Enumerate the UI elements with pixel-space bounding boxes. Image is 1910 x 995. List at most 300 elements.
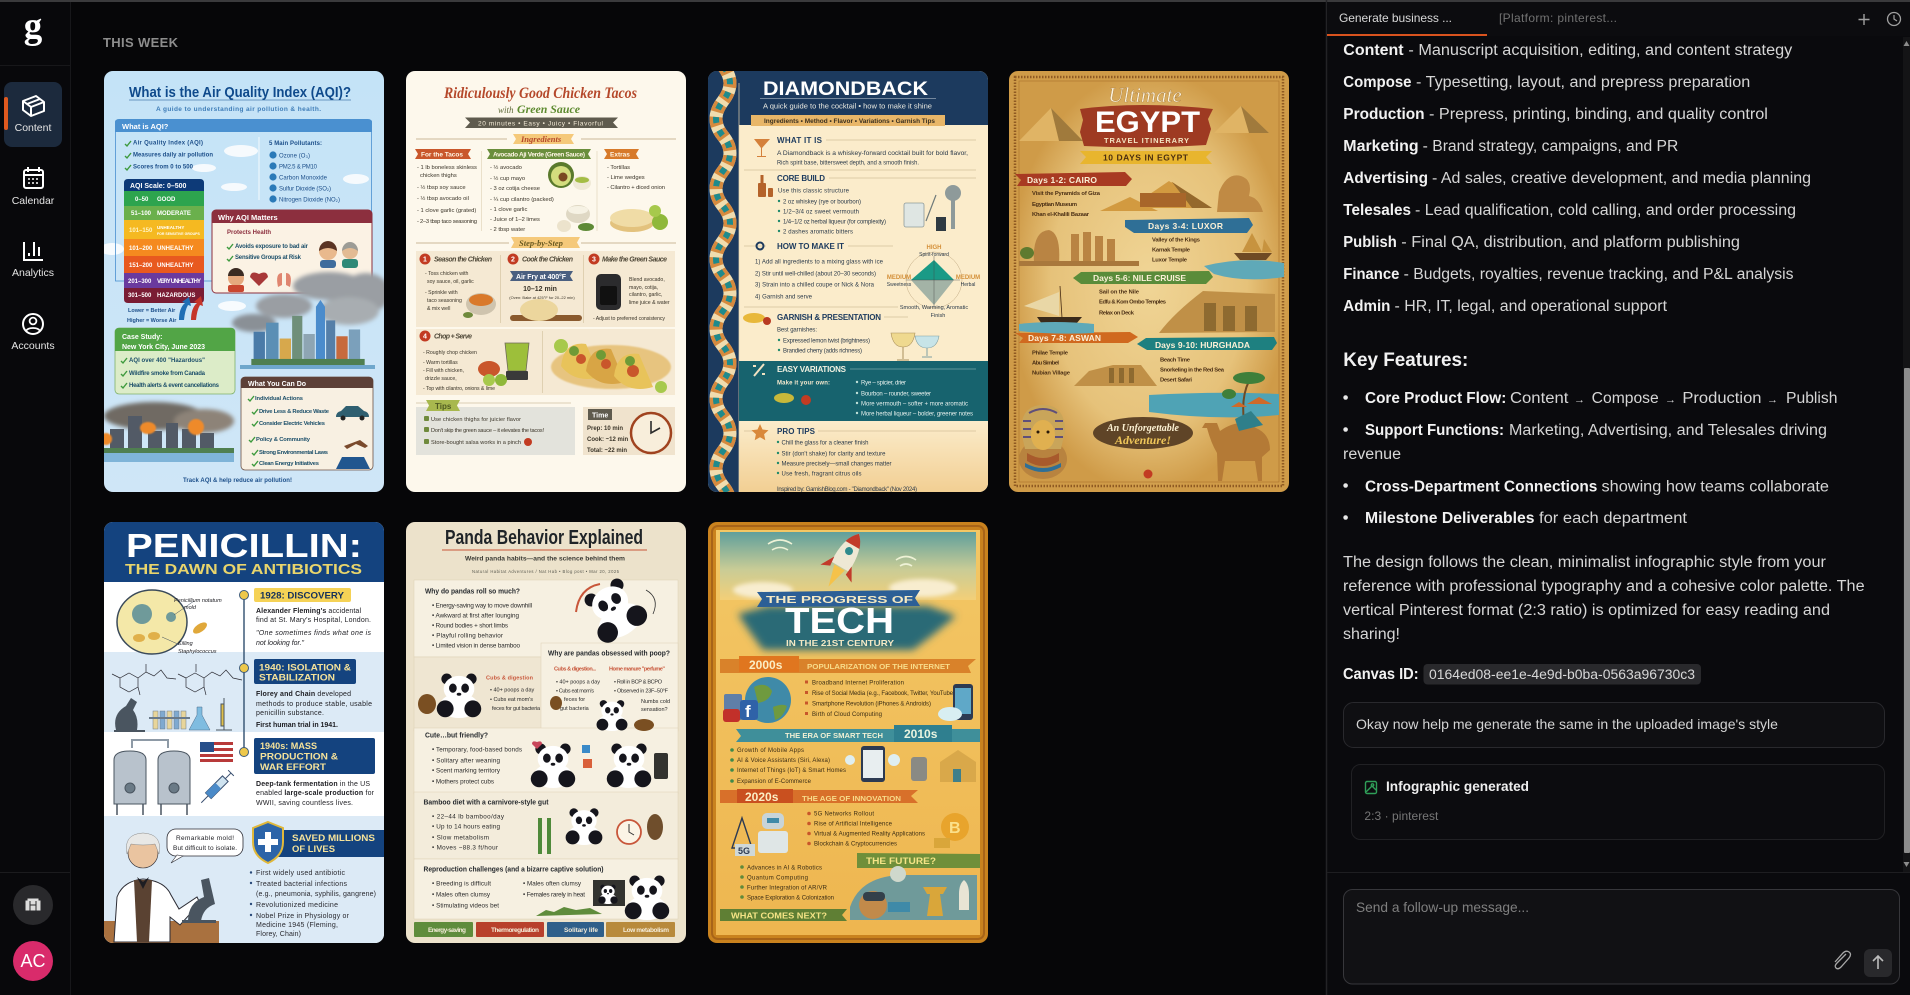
illustration: scientist with microscope	[104, 833, 219, 943]
poop facts: • 40+ poops a day	[556, 680, 600, 686]
illustration: lab equipment	[114, 698, 232, 732]
panel: easy variations: EASY VARIATIONS	[777, 365, 847, 374]
flavor radar chart: Sweetness	[887, 282, 912, 288]
steps panel: mayo, cotija,	[629, 285, 658, 291]
infographic card: egypt travel itinerary: Days 1-2: CAIRO	[1027, 175, 1097, 185]
band: 2010s	[736, 725, 980, 742]
user message bubble	[1344, 702, 1884, 748]
infographic card: chicken tacos: - ½ tbsp soy sauce	[417, 184, 466, 191]
time panel	[583, 407, 675, 455]
air fry banner: (Oven: Bake at 425°F for 20–22 min)	[509, 295, 575, 300]
infographic card: diamondback cocktail: Inspired by: GarnishBlog.com - "Diamondback" (Nov 2024)	[777, 487, 917, 493]
milestone 1940: methods to produce stable, usable	[256, 701, 372, 708]
banner: saved millions	[253, 822, 384, 863]
infographic card: progress of tech: Rise of Artificial Intelligence	[814, 822, 893, 828]
AQI scale table: UNHEALTHY	[157, 246, 194, 252]
band: what comes next: WHAT COMES NEXT?	[731, 910, 827, 920]
key features list: Cross-Department Connections	[1365, 478, 1597, 496]
title banner: THE PROGRESS OF	[766, 595, 913, 606]
milestone 1940: penicillin substance.	[256, 710, 324, 717]
key features list	[1343, 390, 1838, 527]
infographic card: diamondback cocktail: 2 dashes aromatic bitters	[783, 230, 853, 236]
poop facts: Cubs & digestion...	[554, 666, 596, 672]
title banner: TECH	[785, 600, 894, 641]
icon: globe and social apps: f	[745, 702, 751, 721]
infographic card: panda behavior: Reproduction challenges (and a bizarre captive solution)	[424, 864, 604, 874]
milestone 1928	[254, 588, 372, 647]
infographic card: air quality index: Higher = Worse Air	[127, 318, 177, 324]
department list: Publish	[1343, 234, 1397, 251]
poop facts: • Observed in 23F–50°F	[614, 688, 669, 694]
banner: saved millions: OF LIVES	[292, 844, 335, 854]
department list: - Manuscript acquisition, editing, and content strategy	[1408, 42, 1793, 59]
illustration: petri dish: Killing	[178, 641, 194, 647]
infographic card: diamondback cocktail: 1) Add all ingredients to a mixing glass with ice	[755, 260, 884, 266]
title: DIAMONDBACK	[763, 79, 928, 100]
icon: bitcoin: B	[949, 820, 961, 837]
department list: - Budgets, royalties, revenue tracking, and P&L analysis	[1404, 266, 1794, 283]
illustration: nile boat	[1019, 286, 1094, 334]
band: what comes next	[720, 909, 847, 921]
infographic card: chicken tacos: - 2–3 tbsp taco seasoning	[417, 219, 477, 225]
band: 2000s: POPULARIZATION OF THE INTERNET	[807, 664, 951, 671]
infographic card: progress of tech: Virtual & Augmented Reality Applications	[814, 832, 925, 838]
infographic card: diamondback cocktail: 2 oz whiskey (rye or bourbon)	[783, 200, 861, 206]
nav item: Accounts: Accounts	[11, 340, 55, 352]
infographic card: panda behavior: Why are pandas obsessed with poop?	[548, 648, 670, 658]
department list: Finance	[1343, 266, 1400, 283]
generated result card: 2:3 · pinterest	[1364, 809, 1439, 823]
user avatar	[13, 941, 53, 981]
band: 2000s	[720, 656, 976, 673]
icon: avocado and sauce	[548, 162, 591, 190]
infographic card: panda behavior: Cute…but friendly?	[425, 730, 488, 740]
canvas id: 0164ed08-ee1e-4e9d-b0ba-0563a96730c3	[1429, 667, 1695, 682]
footer tags: Low metabolism	[623, 927, 669, 934]
bullet list: Nobel Prize in Physiology or	[256, 913, 350, 920]
panel: easy variations: More herbal liqueur – bolder, greener notes	[861, 412, 973, 418]
tab bar	[1327, 2, 1910, 36]
illustration: petri dish	[117, 590, 222, 655]
infographic card: panda behavior: Weird panda habits—and the science behind them	[465, 556, 625, 562]
timeline	[240, 590, 248, 756]
left navigation sidebar	[0, 0, 70, 995]
icon: 5G tower and robot: 5G	[738, 846, 750, 856]
poop facts: • Cubs eat mom's	[490, 697, 533, 703]
AQI scale table: 301–500	[128, 293, 152, 299]
infographic card: air quality index	[100, 71, 390, 492]
scrollbar	[1903, 37, 1910, 872]
infographic card: panda behavior: Natural Habitat Adventures / Nat Hab • Blog post • Mar 20, 2025	[472, 569, 620, 574]
ten days banner	[1080, 151, 1212, 164]
time panel: Time	[592, 412, 608, 420]
infographic card: egypt travel itinerary: Valley of the Kings	[1152, 238, 1200, 244]
department list: - Final QA, distribution, and platform publishing	[1401, 234, 1740, 251]
infographic card: panda behavior: • Breeding is difficult	[432, 880, 491, 888]
infographic card: chicken tacos: - Cilantro + diced onion	[607, 185, 665, 191]
illustration: molecules	[112, 664, 242, 695]
arrows up	[179, 296, 203, 320]
band: 2020s: 2020s	[745, 790, 779, 804]
poop facts: • Cubs eat mom's	[556, 688, 594, 694]
illustration: luxor temple	[1019, 230, 1139, 266]
air fry banner	[509, 271, 575, 300]
panel: what you can do: Drive Less & Reduce Waste	[259, 409, 330, 415]
infographic card: panda behavior: • Solitary after weaning	[432, 758, 500, 764]
icon: image generated	[1366, 782, 1376, 794]
infographic card: egypt travel itinerary: Khan el-Khalili Bazaar	[1032, 212, 1090, 218]
infographic card: air quality index: A guide to understanding air pollution & health.	[156, 106, 321, 113]
nav item: Calendar: Calendar	[12, 195, 55, 207]
ingredient sub-headers: Extras	[610, 152, 630, 158]
flavor radar chart	[887, 245, 980, 319]
bullet list: Treated bacterial infections	[256, 881, 348, 888]
poop facts: sensation?	[641, 707, 668, 713]
department list: Admin	[1343, 298, 1390, 315]
steps panel	[416, 251, 675, 395]
infographic card: panda behavior: • Round bodies + short limbs	[432, 622, 508, 630]
AQI scale table: 51–100	[131, 211, 152, 217]
infographic card: air quality index: Sulfur Dioxide (SO₂)	[279, 186, 331, 192]
infographic card: egypt travel itinerary: Days 9-10: HURGHADA	[1155, 340, 1250, 350]
speech bubble: Remarkable mold!	[176, 835, 234, 842]
AQI scale table: AQI Scale: 0–500	[130, 183, 187, 190]
infographic card: diamondback cocktail: 2) Stir until well-chilled (about 20–30 seconds)	[755, 272, 876, 278]
nav item: Content (active)	[4, 82, 62, 147]
illustration: ship and sea	[1204, 233, 1284, 279]
footer note: Track AQI & help reduce air pollution!	[183, 478, 292, 484]
steps panel: - Warm tortillas	[423, 360, 458, 366]
footer tags: Solitary life	[564, 927, 598, 934]
panel: what you can do: Individual Actions	[255, 396, 303, 402]
steps panel: lime juice & water	[629, 300, 670, 306]
panel: what you can do	[241, 377, 373, 470]
milestone 1928: 1928: DISCOVERY	[260, 590, 344, 600]
infographic card: diamondback cocktail: 1/2–3/4 oz sweet vermouth	[783, 210, 859, 216]
steps panel: - Adjust to preferred consistency	[593, 316, 665, 322]
tips panel: Use chicken thighs for juicier flavor	[431, 417, 521, 423]
tagline banner	[465, 118, 618, 128]
panel: what you can do: Strong Environmental Laws	[259, 450, 328, 456]
infographic card: chicken tacos: - 3 oz cotija cheese	[490, 186, 540, 192]
ingredient sub-headers	[415, 149, 639, 159]
infographic card: diamondback cocktail: CORE BUILD	[777, 174, 825, 183]
air fry banner: Air Fry at 400°F	[516, 273, 567, 281]
infographic card: chicken tacos: - 1 clove garlic	[490, 207, 527, 213]
infographic card: panda behavior: • Up to 14 hours eating	[432, 824, 500, 830]
footer tags: Thermoregulation	[491, 927, 539, 934]
tab bar: Generate business ...	[1339, 11, 1452, 25]
follow-up input box	[1344, 890, 1900, 984]
milestone 1928: find at St. Mary's Hospital, London.	[256, 617, 371, 624]
illustration: petri dish: mold	[184, 605, 197, 611]
infographic card: egypt travel itinerary: Visit the Pyramids of Giza	[1032, 191, 1101, 197]
steps panel: & mix well	[427, 306, 450, 312]
milestone 1940	[254, 659, 372, 729]
closing paragraph: sharing!	[1343, 626, 1400, 643]
infographic card: chicken tacos: - 2 tbsp water	[490, 227, 525, 233]
icon: garnish glasses	[891, 333, 939, 360]
band: the future: THE FUTURE?	[866, 856, 936, 867]
infographic card: egypt travel itinerary: Days 5-6: NILE CRUISE	[1093, 273, 1186, 283]
icon: US flag	[200, 742, 233, 762]
steps panel: Make the Green Sauce	[602, 256, 667, 264]
callout: unforgettable adventure	[1093, 417, 1193, 449]
tagline banner: 20 minutes • Easy • Juicy • Flavorful	[478, 120, 604, 128]
infographic card: panda behavior: • Slow metabolism	[432, 834, 489, 842]
infographic card: panda behavior: • Energy-saving way to move downhill	[432, 602, 532, 610]
infographic card: chicken tacos: - ¼ cup cilantro (packed)	[490, 197, 554, 203]
milestone 1940s: 1940s: MASS	[260, 741, 317, 751]
illustration: camel	[1202, 411, 1270, 481]
AQI scale table	[124, 179, 204, 303]
panel: case study: Health alerts & event cancellations	[129, 383, 220, 389]
poop facts: feces for gut bacteria	[492, 706, 541, 712]
infographic card: progress of tech: Advances in AI & Robotics	[747, 866, 822, 872]
infographic card: panda behavior: Why do pandas roll so much?	[425, 586, 520, 596]
AQI scale table: MODERATE	[157, 211, 191, 217]
title banner	[757, 590, 920, 648]
closing paragraph: The design follows the clean, minimalist infographic style from your	[1343, 554, 1826, 571]
closing paragraph	[1343, 554, 1865, 643]
key features list: Support Functions:	[1365, 422, 1504, 439]
infographic card: chicken tacos: - Juice of 1–2 limes	[490, 217, 540, 223]
infographic card: diamondback cocktail: A Diamondback is a whiskey-forward cocktail built for bold flavor,	[777, 151, 968, 157]
infographic card: diamondback cocktail: GARNISH & PRESENTATION	[777, 313, 881, 322]
department list: Advertising	[1343, 170, 1428, 187]
key features list: Production	[1682, 390, 1762, 407]
bullet list: (e.g., pneumonia, syphilis, gangrene)	[256, 891, 376, 898]
generated result card: Infographic generated	[1386, 778, 1529, 794]
bullet list: Revolutionized medicine	[256, 902, 338, 909]
infographic card: air quality index: 5 Main Pollutants:	[269, 141, 322, 147]
steps panel: 3	[592, 256, 596, 264]
infographic card: egypt travel itinerary: Snorkeling in the Red Sea	[1160, 368, 1225, 374]
infographic card: air quality index: PM2.5 & PM10	[279, 164, 318, 170]
icon: clock	[631, 413, 671, 453]
flavor radar chart: Herbal	[961, 282, 975, 288]
illustration: red sea beach	[1149, 372, 1279, 421]
braided side strip	[708, 66, 739, 521]
send button	[1864, 949, 1892, 977]
icon: 5G tower and robot	[732, 813, 788, 856]
steps panel: - Toss chicken with	[425, 271, 469, 277]
ingredient sub-headers: Avocado Aji Verde (Green Sauce)	[493, 152, 585, 158]
key features list: Marketing, Advertising, and Telesales driving	[1509, 422, 1827, 439]
department list: - HR, IT, legal, and operational support	[1394, 298, 1668, 315]
steps panel: - Roughly chop chicken	[423, 350, 477, 356]
illustration: future scene	[850, 866, 977, 920]
workspace button	[13, 885, 53, 925]
speech bubble	[167, 829, 243, 863]
infographic card: egypt travel itinerary: Days 3-4: LUXOR	[1148, 221, 1223, 231]
AQI scale table: GOOD	[157, 197, 176, 203]
infographic card: panda behavior: • Females rarely in heat	[523, 892, 585, 898]
infographic card: panda behavior: Panda Behavior Explained	[445, 527, 643, 549]
top pyramids	[1019, 106, 1269, 141]
infographic card: chicken tacos: Green Sauce	[517, 102, 581, 116]
poop facts: • 40+ poops a day	[490, 688, 535, 694]
infographic card: air quality index: What is the Air Quality Index (AQI)?	[129, 85, 351, 101]
infographic card: diamondback cocktail: Measure precisely—small changes matter	[782, 462, 892, 468]
flavor radar chart: HIGH	[926, 245, 942, 251]
poop facts: Numbs cold	[641, 699, 670, 705]
title banner: IN THE 21ST CENTURY	[786, 638, 894, 648]
infographic card: diamondback cocktail: 1/4–1/2 oz herbal liqueur (for complexity)	[783, 220, 886, 226]
icon: phone and cloud	[938, 684, 973, 721]
panel: case study: New York City, June 2023	[122, 344, 205, 351]
AQI scale table: FOR SENSITIVE GROUPS	[157, 232, 200, 236]
nav item: Content (active): Content	[15, 122, 51, 134]
tips panel: Don't skip the green sauce – it elevates the tacos!	[431, 428, 544, 434]
tab bar: [Platform: pinterest...	[1499, 11, 1617, 25]
infographic card: chicken tacos: - Tortillas	[607, 165, 630, 171]
icon: tortilla on board	[510, 299, 582, 321]
infographic card: air quality index: Carbon Monoxide	[279, 176, 328, 182]
infographic card: panda behavior: • Temporary, food-based bonds	[432, 746, 522, 754]
smoke over skyline	[232, 272, 390, 332]
department list: - Typesetting, layout, and prepress preparation	[1416, 74, 1750, 91]
panel: easy variations: Rye – spicier, drier	[861, 380, 906, 386]
main title block: EGYPT	[1095, 106, 1200, 139]
band: 2020s	[720, 789, 918, 804]
steps panel: - Top with cilantro, onions & lime	[423, 386, 495, 392]
flavor radar chart: Spirit-forward	[919, 252, 949, 258]
illustration: fermentation tanks	[114, 740, 190, 815]
infographic card: progress of tech: AI & Voice Assistants (Siri, Alexa)	[737, 758, 830, 764]
infographic card: air quality index: Air Quality Index (AQI)	[133, 140, 203, 146]
ingredients heading: Ingredients	[520, 134, 562, 144]
AQI scale table: 0–50	[135, 197, 149, 203]
infographic card: egypt travel itinerary: Edfu & Kom Ombo Temples	[1099, 300, 1166, 306]
poop facts	[486, 666, 670, 713]
infographic card: progress of tech	[708, 522, 988, 943]
infographic card: diamondback cocktail: Stir (don't shake) for clarity and texture	[782, 452, 886, 458]
key features list: →	[1574, 394, 1585, 406]
illustration: aswan temple	[1074, 365, 1157, 386]
icon: attach	[1835, 951, 1850, 969]
illustration: pharaoh	[1019, 405, 1067, 479]
ingredients heading	[513, 134, 574, 144]
poop facts: gut bacteria	[560, 706, 590, 712]
department list: Compose	[1343, 74, 1412, 91]
dark burst behind title	[738, 606, 956, 650]
icon: martini	[754, 139, 770, 157]
footer tags	[414, 922, 675, 937]
panel: case study: AQI over 400 "Hazardous"	[129, 358, 205, 364]
key features list: Core Product Flow:	[1365, 390, 1506, 407]
user avatar: AC	[20, 951, 46, 971]
steps panel: soy sauce, oil, garlic	[427, 279, 474, 285]
steps panel: cilantro, garlic,	[629, 292, 662, 298]
department list	[1343, 42, 1811, 315]
steps panel: 4	[423, 334, 427, 340]
milestone 1940: Florey and Chain developed	[256, 691, 351, 698]
icon: globe and social apps	[723, 677, 791, 723]
infographic card: diamondback cocktail: WHAT IT IS	[777, 136, 823, 145]
milestone 1940s: PRODUCTION &	[260, 752, 339, 762]
poop facts: Cubs & digestion	[486, 676, 534, 682]
infographic card: chicken tacos: - 1 lb boneless skinless	[417, 165, 477, 171]
infographic card: progress of tech: Internet of Things (IoT) & Smart Homes	[737, 768, 846, 774]
AQI scale table: HAZARDOUS	[157, 293, 195, 299]
tips panel: Tips	[435, 402, 452, 411]
infographic card: chicken tacos: with	[498, 105, 514, 115]
air fry banner: 10–12 min	[523, 286, 557, 293]
time panel: Cook: ~12 min	[587, 437, 629, 443]
infographic card: air quality index: What is AQI?	[122, 122, 169, 131]
panel: what you can do: What You Can Do	[248, 381, 306, 388]
nav item: Analytics: Analytics	[12, 267, 54, 279]
nav item: Accounts	[11, 314, 55, 352]
ten days banner: 10 DAYS IN EGYPT	[1103, 152, 1189, 162]
infographic card: progress of tech: Broadband Internet Proliferation	[812, 680, 904, 686]
infographic card: air quality index: Ozone (O₃)	[279, 154, 310, 160]
panel: case study	[115, 328, 235, 394]
ingredient sub-headers: For the Tacos	[421, 152, 463, 158]
infographic card: progress of tech: Growth of Mobile Apps	[737, 748, 804, 754]
milestone 1940s: WAR EFFORT	[260, 762, 327, 772]
closing paragraph: vertical Pinterest format (2:3 ratio) is optimized for easy reading and	[1343, 602, 1830, 619]
panel: what you can do: Consider Electric Vehicles	[259, 421, 325, 427]
bullet list	[250, 870, 376, 938]
infographic card: egypt travel itinerary: Philae Temple	[1032, 350, 1069, 356]
tips panel	[416, 400, 575, 455]
panel: why AQI matters: Avoids exposure to bad air	[235, 244, 309, 250]
infographic card: progress of tech: Further Integration of AR/VR	[747, 886, 828, 892]
panel: why AQI matters: Protects Health	[227, 230, 271, 236]
milestone 1940s: Deep-tank fermentation in the US	[256, 781, 370, 788]
bullet list: First widely used antibiotic	[256, 870, 346, 877]
panel: why AQI matters: Why AQI Matters	[218, 213, 278, 222]
header: THE DAWN OF ANTIBIOTICS	[125, 561, 362, 578]
illustration: petri dish: Staphylococcus	[178, 649, 217, 655]
milestone 1940s: enabled large-scale production for	[256, 790, 375, 797]
bullet list: Medicine 1945 (Fleming,	[256, 922, 338, 929]
follow-up input box: Send a follow-up message...	[1356, 899, 1529, 915]
panel: easy variations: More vermouth – softer + more aromatic	[861, 402, 968, 408]
infographic card: egypt travel itinerary: Desert Safari	[1160, 378, 1192, 384]
steps panel: 1	[423, 256, 427, 264]
banner: saved millions: SAVED MILLIONS	[292, 833, 375, 843]
clouds and signal icons	[733, 540, 957, 598]
AQI scale table: UNHEALTHY	[157, 225, 184, 230]
icon: cheese bowl and garlic	[557, 205, 594, 232]
steps panel: taco seasoning	[427, 298, 462, 304]
canvas id: Canvas ID:	[1343, 666, 1419, 683]
infographic card: diamondback cocktail: Expressed lemon twist (brightness)	[783, 338, 870, 344]
milestone 1940: First human trial in 1941.	[256, 722, 338, 729]
infographic card: egypt travel itinerary: Relax on Deck	[1099, 310, 1135, 316]
infographic card: diamondback cocktail: Best garnishes:	[777, 328, 817, 334]
infographic card: chicken tacos: - ½ tbsp avocado oil	[417, 195, 469, 202]
milestone 1928: Alexander Fleming's accidental	[256, 608, 361, 615]
flavor radar chart: MEDIUM	[956, 275, 980, 281]
icon: gear	[756, 242, 764, 250]
infographic card: panda behavior	[406, 522, 686, 943]
steps panel: Chop + Serve	[434, 334, 472, 340]
infographic card: diamondback cocktail: Chill the glass for a cleaner finish	[782, 440, 868, 446]
key features list: Compose	[1592, 390, 1659, 407]
poop facts: Home manure "perfume"	[609, 666, 665, 672]
icon: tortillas and limes	[610, 205, 668, 232]
infographic card: progress of tech: Space Exploration & Colonization	[747, 896, 834, 902]
panel: easy variations: Bourbon – rounder, sweeter	[861, 392, 931, 398]
panel: what you can do: Policy & Community	[256, 437, 311, 443]
icon: blender	[478, 343, 529, 386]
milestone 1928: "One sometimes finds what one is	[256, 630, 372, 637]
infographic card: egypt travel itinerary: Beach Time	[1160, 358, 1191, 364]
